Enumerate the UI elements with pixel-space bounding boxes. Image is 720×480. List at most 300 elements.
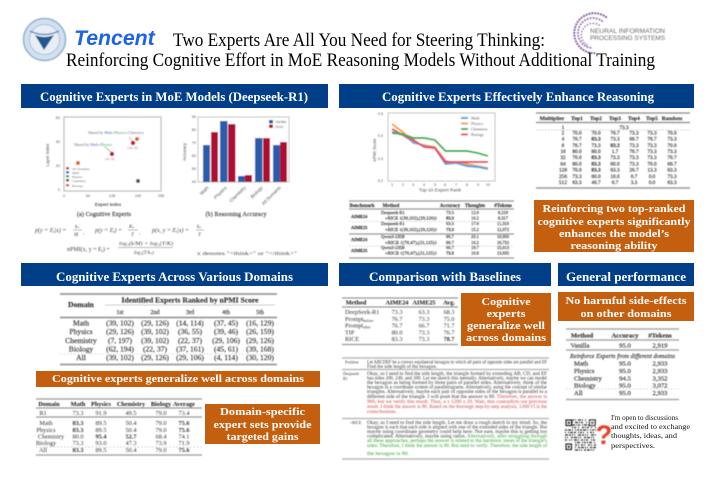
table: case-study responses: R1 bbox=[343, 376, 348, 381]
table: benchmark results: Qwen3-235B bbox=[381, 234, 405, 239]
table: multiplier vs top experts: 63.3 bbox=[667, 168, 677, 174]
table: general performance: Accuracy bbox=[611, 332, 639, 340]
table: identified experts by domain: Physics bbox=[69, 327, 93, 336]
heading: Comparison with Baselines bbox=[339, 263, 551, 286]
bar chart: reasoning accuracy: Accuracy bbox=[182, 142, 187, 161]
table: multiplier vs top experts: Top4 bbox=[628, 116, 640, 122]
bar chart: reasoning accuracy: Physics bbox=[213, 185, 228, 200]
table: general performance: 95.0 bbox=[619, 390, 632, 397]
table: general performance: Math bbox=[574, 360, 589, 368]
table: benchmark results: #Tokens bbox=[494, 204, 512, 209]
table: multiplier vs top experts: 73.3 bbox=[629, 130, 639, 136]
table: multiplier vs top experts: 70.0 bbox=[667, 143, 677, 149]
table: multiplier vs top experts: 70.0 bbox=[591, 130, 601, 136]
table: benchmark results: Benchmark bbox=[350, 204, 375, 209]
bar chart: reasoning accuracy: 50 bbox=[192, 167, 196, 171]
bar chart: reasoning accuracy: All Domains bbox=[261, 185, 282, 206]
table: benchmark results: 8,317 bbox=[498, 216, 509, 222]
formulas: log₂(k/M) + log₂(T/K) bbox=[119, 242, 173, 247]
table: multiplier vs top experts: 46.7 bbox=[591, 180, 601, 186]
table: identified experts by domain: (30, 120) bbox=[246, 353, 274, 362]
formulas: i bbox=[102, 248, 104, 253]
formulas: kn bbox=[75, 225, 79, 230]
logo: NeurIPS: PROCESSING SYSTEMS bbox=[590, 35, 665, 42]
table: multiplier vs top experts: 83.3 bbox=[591, 162, 601, 168]
table: domain accuracy: Biology bbox=[36, 440, 57, 447]
scatter chart: cognitive experts: All Domains bbox=[72, 167, 90, 171]
table: multiplier vs top experts: 6.7 bbox=[612, 180, 619, 186]
table: multiplier vs top experts: 0.0 bbox=[649, 174, 656, 180]
bar chart: reasoning accuracy: 70 bbox=[192, 141, 196, 145]
table: multiplier vs top experts: 16 bbox=[560, 149, 566, 155]
table: domain accuracy: Average bbox=[173, 401, 195, 408]
formulas: log₂(T/kₙ) bbox=[134, 251, 154, 256]
table: multiplier vs top experts: Top1 bbox=[571, 116, 583, 122]
table: benchmark results: +RICE {(39,102),(29,126)} bbox=[385, 227, 437, 233]
line chart: top-10 expert rank bbox=[372, 112, 495, 194]
table: identified experts by domain: (29, 126) bbox=[106, 327, 134, 336]
table: multiplier vs top experts: 73.3 bbox=[667, 136, 677, 142]
table: comparison with baselines: DeepSeek-R1 bbox=[345, 309, 379, 316]
table: identified experts by domain: (22, 37) bbox=[143, 344, 167, 354]
table: general performance: 2,933 bbox=[652, 368, 668, 375]
bar chart: reasoning accuracy: Math bbox=[199, 185, 210, 196]
table: identified experts by domain: (14, 114) bbox=[176, 318, 204, 328]
heading: Cognitive Experts Effectively Enhance Reasoning: Cognitive Experts Effectively Enhance Reasoning bbox=[382, 90, 655, 104]
table: multiplier vs top experts: 73.3 bbox=[629, 143, 639, 149]
table: comparison with baselines: Prompt bbox=[345, 316, 363, 323]
table: general performance: Vanilla bbox=[571, 342, 589, 350]
table: benchmark results: 73.3 bbox=[446, 250, 455, 256]
table: multiplier vs top experts: 512 bbox=[559, 180, 567, 186]
table: multiplier vs top experts: 4 bbox=[562, 136, 565, 142]
table: benchmark results: 66.7 bbox=[446, 245, 455, 250]
table: identified experts by domain: (29, 126) bbox=[141, 318, 169, 328]
table: domain accuracy: 50.4 bbox=[125, 427, 137, 434]
heading: Cognitive Experts Effectively Enhance Reasoning bbox=[339, 84, 694, 108]
scatter chart: cognitive experts: (29, 39) bbox=[105, 157, 114, 162]
bar chart: reasoning accuracy: 60 bbox=[192, 154, 196, 158]
contact note: thoughts, ideas, and bbox=[611, 431, 677, 440]
line chart: top-10 expert rank: nPMI Score bbox=[372, 138, 377, 161]
table: domain accuracy bbox=[36, 399, 202, 455]
callout: generalize well across domains bbox=[36, 371, 320, 387]
table: comparison with baselines: 73.3 bbox=[419, 316, 429, 323]
table: benchmark results: +RICE {(70,47),(21,115)} bbox=[385, 240, 437, 246]
table: case-study responses: the hexagon is 80. bbox=[367, 452, 409, 457]
table: multiplier vs top experts: 66.7 bbox=[629, 136, 639, 142]
table: multiplier vs top experts: 32 bbox=[560, 155, 566, 161]
formulas: kn bbox=[197, 225, 201, 230]
table: multiplier vs top experts: 63.3 bbox=[610, 168, 620, 174]
table: case-study responses: maybe using coordinate geometry could help here. Not sure, maybe this is getting too bbox=[367, 430, 548, 435]
table: domain accuracy: 73.3 bbox=[72, 410, 84, 417]
contact note: I'm open to discussions bbox=[611, 413, 678, 422]
line chart: top-10 expert rank: 3 bbox=[412, 183, 414, 187]
table: comparison with baselines bbox=[342, 298, 458, 344]
table: multiplier vs top experts: 73.3 bbox=[629, 155, 639, 161]
callout: no harmful side-effects: No harmful side-effects bbox=[566, 296, 686, 307]
table: multiplier vs top experts: 1.7 bbox=[612, 149, 619, 155]
scatter chart: cognitive experts: 40 bbox=[56, 140, 60, 144]
table: benchmark results: 16.8 bbox=[471, 250, 480, 256]
bar chart: reasoning accuracy: Ours bbox=[275, 125, 283, 129]
logo: NeurIPS bbox=[574, 13, 665, 53]
table: domain accuracy: Physics bbox=[36, 427, 56, 434]
contact note: perspectives. bbox=[611, 441, 655, 450]
scatter chart: cognitive experts: (a) Cognitive Experts bbox=[77, 211, 132, 218]
table: domain accuracy: 74.1 bbox=[178, 434, 190, 440]
table: multiplier vs top experts: 2 bbox=[562, 130, 565, 136]
table: benchmark results: 16.2 bbox=[471, 240, 479, 245]
table: general performance: Method bbox=[571, 332, 593, 340]
table: domain accuracy: 49.5 bbox=[125, 410, 137, 417]
line chart: top-10 expert rank: 0.5 bbox=[378, 112, 383, 116]
table: identified experts by domain: Domain bbox=[68, 300, 95, 309]
callout: generalize well across domains: Cognitive experts generalize well across domains bbox=[52, 374, 304, 385]
table: case-study responses: triangles. Alternatively, maybe each pair of opposite sides of the hexagon is parallel to a bbox=[367, 390, 548, 395]
logo: Tencent: Tencent bbox=[74, 26, 156, 50]
table: benchmark results: 8,219 bbox=[498, 210, 509, 216]
line chart: top-10 expert rank: 0.4 bbox=[378, 134, 383, 138]
table: case-study responses: 960, but we verify this result. Thus, a x 1200 x 20. Wait, this contradicts our previous bbox=[367, 400, 547, 405]
table: identified experts by domain: Math bbox=[73, 318, 89, 328]
scatter chart: cognitive experts bbox=[45, 116, 164, 218]
formulas: p(y = E bbox=[95, 228, 113, 234]
table: multiplier vs top experts: 8 bbox=[562, 143, 565, 149]
table: domain accuracy: 47.3 bbox=[125, 440, 137, 447]
callout: reinforcing two top-ranked experts: enhances the model’s bbox=[559, 229, 669, 240]
table: multiplier vs top experts: 66.7 bbox=[667, 162, 677, 168]
table: comparison with baselines: 66.7 bbox=[419, 322, 429, 330]
formulas bbox=[34, 225, 297, 257]
table: domain accuracy: 52.7 bbox=[125, 434, 137, 440]
table: multiplier vs top experts: 76.7 bbox=[610, 130, 620, 136]
table: benchmark results: 10,732 bbox=[497, 240, 509, 246]
table: identified experts by domain: (39, 102) bbox=[141, 336, 169, 345]
table: general performance: Physics bbox=[574, 368, 595, 375]
table: multiplier vs top experts: 70.0 bbox=[572, 155, 582, 161]
table: domain accuracy: Chemistry bbox=[38, 434, 65, 440]
heading: Cognitive Experts Across Various Domains bbox=[21, 263, 328, 286]
table: domain accuracy: 93.0 bbox=[95, 440, 107, 447]
callout: cognitive experts generalize well: experts bbox=[486, 309, 526, 320]
heading: General performance bbox=[558, 263, 694, 286]
table: benchmark results: Accuracy bbox=[440, 204, 461, 209]
table: domain accuracy: 89.5 bbox=[95, 447, 107, 454]
table: multiplier vs top experts: 73.3 bbox=[629, 162, 639, 168]
table: domain accuracy: R1 bbox=[39, 410, 47, 417]
table: multiplier vs top experts: 76.7 bbox=[629, 149, 639, 155]
table: case-study responses: has sides 200, 240, and 300. Let me sketch this mentally. Alternatively, maybe we can model bbox=[367, 376, 548, 382]
table: multiplier vs top experts bbox=[536, 113, 690, 188]
heading: Comparison with Baselines: Comparison with Baselines bbox=[369, 269, 521, 284]
table: domain accuracy: 73.9 bbox=[155, 440, 167, 447]
bar chart: reasoning accuracy: 90 bbox=[192, 115, 196, 119]
table: general performance: 2,933 bbox=[652, 390, 668, 397]
table: comparison with baselines: 63.3 bbox=[419, 309, 429, 316]
table: comparison with baselines: AIME24 bbox=[385, 300, 409, 306]
table: case-study responses: Problem bbox=[345, 360, 359, 364]
table: benchmark results: 73.3 bbox=[446, 227, 455, 232]
scatter chart: cognitive experts: 256 bbox=[158, 194, 164, 198]
heading: General performance: General performance bbox=[566, 269, 686, 284]
line chart: top-10 expert rank: 1 bbox=[391, 183, 393, 187]
bar chart: reasoning accuracy: Chemistry bbox=[229, 185, 247, 203]
heading: Cognitive Experts Across Various Domains: Cognitive Experts Across Various Domains bbox=[56, 269, 293, 284]
table: comparison with baselines: before bbox=[363, 318, 374, 323]
callout: cognitive experts generalize well: across domains bbox=[466, 333, 546, 344]
table: identified experts by domain: (39, 102) bbox=[141, 327, 169, 336]
line chart: top-10 expert rank: 5 bbox=[434, 183, 436, 187]
line chart: top-10 expert rank: Top-10 Expert Rank bbox=[419, 188, 462, 194]
table: domain accuracy: Physics bbox=[91, 401, 112, 408]
table: case-study responses: sides. Therefore, I think the answer is 80. But need to verify. Therefore, the side length of bbox=[367, 444, 547, 449]
table: multiplier vs top experts: 73.3 bbox=[647, 149, 657, 155]
table: comparison with baselines: 76.7 bbox=[392, 316, 402, 323]
table: domain accuracy: 80.0 bbox=[72, 434, 84, 440]
table: domain accuracy: All bbox=[39, 447, 47, 454]
callout: domain-specific expert sets bbox=[205, 404, 320, 444]
table: identified experts by domain: Chemistry bbox=[65, 336, 97, 345]
table: benchmark results: AIME25 bbox=[351, 225, 368, 230]
table: identified experts by domain: 3rd bbox=[186, 310, 194, 316]
table: domain accuracy: 50.4 bbox=[125, 447, 137, 454]
bar chart: reasoning accuracy: Biology bbox=[250, 185, 264, 199]
table: comparison with baselines: 76.7 bbox=[444, 330, 454, 336]
table: benchmark results: 15,013 bbox=[497, 245, 510, 251]
title: Two Experts Are All You Need for Steering Thinking: bbox=[173, 31, 545, 51]
table: general performance: 2,933 bbox=[652, 360, 668, 368]
formulas: x denotes "<think>" or "</think>" bbox=[197, 251, 297, 257]
formulas: ) = bbox=[114, 227, 122, 234]
line chart: top-10 expert rank: 4 bbox=[423, 183, 425, 187]
table: comparison with baselines: RICE bbox=[345, 336, 359, 343]
table: identified experts by domain: (29, 126) bbox=[246, 336, 274, 345]
formulas: , bbox=[83, 231, 84, 236]
table: benchmark results: 13,935 bbox=[497, 250, 510, 256]
table: identified experts by domain: (4, 114) bbox=[214, 353, 238, 362]
table: multiplier vs top experts: 1 bbox=[562, 125, 565, 131]
table: multiplier vs top experts: 63.3 bbox=[667, 180, 677, 186]
table: general performance: All bbox=[574, 390, 583, 397]
formulas: i bbox=[53, 229, 54, 234]
table: general performance bbox=[566, 329, 679, 400]
table: domain accuracy: Math bbox=[71, 401, 86, 408]
table: domain accuracy: 75.6 bbox=[178, 447, 190, 454]
table: general performance: 94.5 bbox=[619, 376, 632, 382]
table: domain accuracy: 91.9 bbox=[95, 410, 107, 417]
formulas: p(y = E bbox=[35, 228, 53, 234]
table: multiplier vs top experts: 76.7 bbox=[667, 155, 677, 161]
table: domain accuracy: Chemistry bbox=[117, 401, 146, 408]
callout: reinforcing two top-ranked experts: cognitive experts significantly bbox=[538, 217, 691, 228]
table: multiplier vs top experts: 3.3 bbox=[631, 180, 638, 186]
table: case-study responses: conclusion. bbox=[367, 410, 397, 415]
table: benchmark results: 83.3 bbox=[446, 216, 455, 220]
table: multiplier vs top experts: Top3 bbox=[609, 116, 621, 122]
table: comparison with baselines: Prompt bbox=[345, 322, 363, 330]
table: comparison with baselines: 83.3 bbox=[392, 336, 402, 343]
scatter chart: cognitive experts: 192 bbox=[135, 194, 141, 198]
table: comparison with baselines: TIP bbox=[345, 330, 355, 336]
table: comparison with baselines: 71.7 bbox=[444, 322, 454, 330]
table: case-study responses: Let ABCDEF be a convex equilateral hexagon in which all pairs of opposite sides are parallel and EF bbox=[367, 360, 547, 366]
table: comparison with baselines: Method bbox=[346, 300, 367, 306]
line chart: top-10 expert rank: 8 bbox=[466, 183, 468, 187]
icon: QR code bbox=[565, 420, 596, 450]
table: identified experts by domain: 1st bbox=[116, 310, 124, 316]
table: case-study responses: hexagon in a coordinate system of parallelograms. Alternatively, using the concept of similar bbox=[367, 386, 547, 390]
table: multiplier vs top experts: 70.0 bbox=[572, 168, 582, 174]
table: multiplier vs top experts: 73.3 bbox=[647, 130, 657, 136]
table: comparison with baselines: 78.7 bbox=[444, 336, 454, 343]
formulas: nPMI(x, y = E bbox=[67, 247, 102, 253]
table: multiplier vs top experts: 83.3 bbox=[591, 168, 601, 174]
scatter chart: cognitive experts: Chemistry bbox=[72, 179, 86, 183]
line chart: top-10 expert rank: Biology bbox=[471, 132, 484, 137]
table: general performance: 95.0 bbox=[619, 342, 632, 350]
table: comparison with baselines: 68.3 bbox=[444, 309, 454, 316]
table: general performance: Reinforce Experts from different domains bbox=[569, 353, 675, 360]
line chart: top-10 expert rank: Math bbox=[471, 116, 479, 120]
callout: reinforcing two top-ranked experts bbox=[534, 200, 694, 252]
table: multiplier vs top experts: 80.0 bbox=[572, 162, 582, 168]
table: case-study responses: all these approaches, perhaps the answer is related to the harmonic mean of the triangle's bbox=[367, 439, 547, 444]
table: identified experts by domain: Biology bbox=[69, 344, 93, 354]
table: case-study responses: Okay, so I need to find the side length. Let me draw a rough sketch in my mind. So, the bbox=[367, 421, 547, 426]
table: identified experts by domain: (45, 61) bbox=[214, 344, 238, 354]
table: multiplier vs top experts: 63.3 bbox=[572, 180, 582, 186]
table: benchmark results: 11,310 bbox=[497, 221, 510, 227]
table: general performance: Chemistry bbox=[574, 376, 603, 382]
scatter chart: cognitive experts: Math bbox=[72, 171, 79, 175]
table: benchmark results: 12,072 bbox=[497, 227, 509, 233]
callout: domain-specific expert sets: expert sets provide bbox=[214, 420, 312, 431]
table: benchmark results: +RICE {(70,47),(21,115)} bbox=[385, 250, 437, 256]
table: case-study responses: +RICE bbox=[350, 420, 362, 425]
callout: reinforcing two top-ranked experts: Reinforcing two top-ranked bbox=[542, 204, 686, 215]
formulas: T bbox=[131, 233, 135, 238]
table: general performance: 3,072 bbox=[652, 382, 668, 390]
table: case-study responses bbox=[342, 358, 549, 459]
table: multiplier vs top experts: 64 bbox=[560, 162, 566, 168]
table: benchmark results: 63.3 bbox=[446, 221, 455, 226]
table: identified experts by domain: (29, 106) bbox=[212, 336, 240, 345]
line chart: top-10 expert rank: 0.3 bbox=[378, 157, 383, 161]
bar chart: reasoning accuracy: 80 bbox=[192, 128, 196, 132]
line chart: top-10 expert rank: Chemistry bbox=[471, 126, 488, 132]
table: multiplier vs top experts: 73.3 bbox=[610, 136, 620, 142]
table: identified experts by domain: (16, 129) bbox=[246, 318, 274, 328]
table: general performance: 95.0 bbox=[619, 360, 632, 368]
table: multiplier vs top experts: 70.0 bbox=[572, 130, 582, 136]
table: domain accuracy: 73.4 bbox=[178, 410, 190, 417]
table: benchmark results: AIME24 bbox=[351, 237, 368, 242]
table: multiplier vs top experts: 73.3 bbox=[667, 149, 677, 155]
callout: no harmful side-effects: on other domains bbox=[580, 309, 672, 320]
scatter chart: cognitive experts: Expert Index bbox=[95, 202, 122, 207]
table: multiplier vs top experts: 6.7 bbox=[631, 174, 638, 180]
table: benchmark results: Deepseek-R1 bbox=[381, 210, 405, 215]
table: benchmark results: AIME25 bbox=[351, 248, 368, 253]
table: benchmark results: 15.2 bbox=[471, 227, 479, 232]
scatter chart: cognitive experts: Layer Index bbox=[45, 143, 50, 166]
table: multiplier vs top experts: 73.3 bbox=[667, 174, 677, 180]
line chart: top-10 expert rank: 0.2 bbox=[378, 179, 383, 183]
icon: red question mark: ? bbox=[596, 420, 612, 450]
table: general performance: 95.0 bbox=[619, 368, 632, 375]
table: multiplier vs top experts: 76.7 bbox=[647, 136, 657, 142]
table: benchmark results: 10.2 bbox=[471, 216, 479, 220]
callout: domain-specific expert sets: Domain-specific bbox=[220, 407, 305, 418]
table: comparison with baselines: 73.3 bbox=[419, 330, 429, 336]
scatter chart: cognitive experts: Shared by Math+Physics bbox=[74, 143, 113, 147]
table: domain accuracy: 83.3 bbox=[72, 447, 84, 454]
table: benchmark results: 73.3 bbox=[446, 210, 455, 215]
table: domain accuracy: 83.3 bbox=[72, 427, 84, 434]
formulas: , bbox=[139, 231, 140, 236]
table: identified experts by domain: (62, 194) bbox=[106, 344, 134, 354]
callout: no harmful side-effects bbox=[558, 292, 694, 321]
contact note bbox=[611, 413, 691, 450]
bar chart: reasoning accuracy bbox=[182, 115, 289, 218]
table: multiplier vs top experts: 76.7 bbox=[572, 136, 582, 142]
table: multiplier vs top experts: 73.3 bbox=[647, 143, 657, 149]
table: general performance: Biology bbox=[574, 382, 596, 390]
line chart: top-10 expert rank: 9 bbox=[477, 183, 479, 187]
table: domain accuracy: 50.4 bbox=[125, 420, 137, 427]
formulas: M bbox=[73, 233, 79, 238]
table: domain accuracy: 68.4 bbox=[155, 434, 167, 440]
table: case-study responses: Okay, so I need to find the side length, the triangle formed by extending AB, CD, and EF bbox=[367, 372, 547, 377]
table: identified experts by domain bbox=[60, 294, 277, 364]
formulas: Kn bbox=[128, 225, 134, 230]
table: multiplier vs top experts: Top5 bbox=[646, 116, 658, 122]
table: identified experts by domain: (36, 55) bbox=[178, 327, 202, 336]
table: multiplier vs top experts: Random bbox=[662, 116, 683, 122]
table: identified experts by domain: (37, 161) bbox=[176, 344, 204, 354]
table: identified experts by domain: (39, 102) bbox=[106, 353, 134, 362]
table: benchmark results: 12.0 bbox=[471, 210, 480, 215]
table: benchmark results: 10,956 bbox=[497, 234, 510, 240]
bar chart: reasoning accuracy: (b) Reasoning Accuracy bbox=[206, 211, 266, 218]
table: benchmark results: 86.7 bbox=[446, 240, 455, 245]
scatter chart: cognitive experts: 64 bbox=[86, 194, 90, 198]
table: domain accuracy: Biology bbox=[151, 401, 172, 408]
table: multiplier vs top experts: 70.0 bbox=[667, 130, 677, 136]
line chart: top-10 expert rank: Physics bbox=[471, 121, 484, 126]
table: domain accuracy: 71.9 bbox=[178, 440, 190, 447]
table: benchmark results: +RICE {(39,102),(29,126)} bbox=[385, 216, 437, 222]
table: multiplier vs top experts: 83.3 bbox=[591, 155, 601, 161]
table: benchmark results: Qwen3-235B bbox=[381, 245, 405, 250]
contact note: and excited to exchange bbox=[611, 422, 691, 431]
table: domain accuracy: 89.5 bbox=[95, 427, 107, 434]
scatter chart: cognitive experts: (166, 39) bbox=[127, 146, 138, 151]
table: domain accuracy: Domain bbox=[38, 401, 60, 408]
formulas: i bbox=[176, 229, 177, 234]
table: case-study responses: Deepseek- bbox=[343, 371, 361, 376]
title bbox=[66, 31, 655, 71]
table: comparison with baselines: 73.3 bbox=[419, 336, 429, 343]
table: comparison with baselines: Avg. bbox=[443, 300, 455, 306]
table: benchmark results bbox=[349, 201, 514, 258]
table: case-study responses: different side of the triangle. I will posit that the answer is 80. Therefore, the answer is bbox=[367, 395, 547, 400]
table: domain accuracy: 75.6 bbox=[178, 420, 190, 427]
table: multiplier vs top experts: 80.0 bbox=[591, 149, 601, 155]
table: identified experts by domain: (29, 106) bbox=[176, 353, 204, 362]
